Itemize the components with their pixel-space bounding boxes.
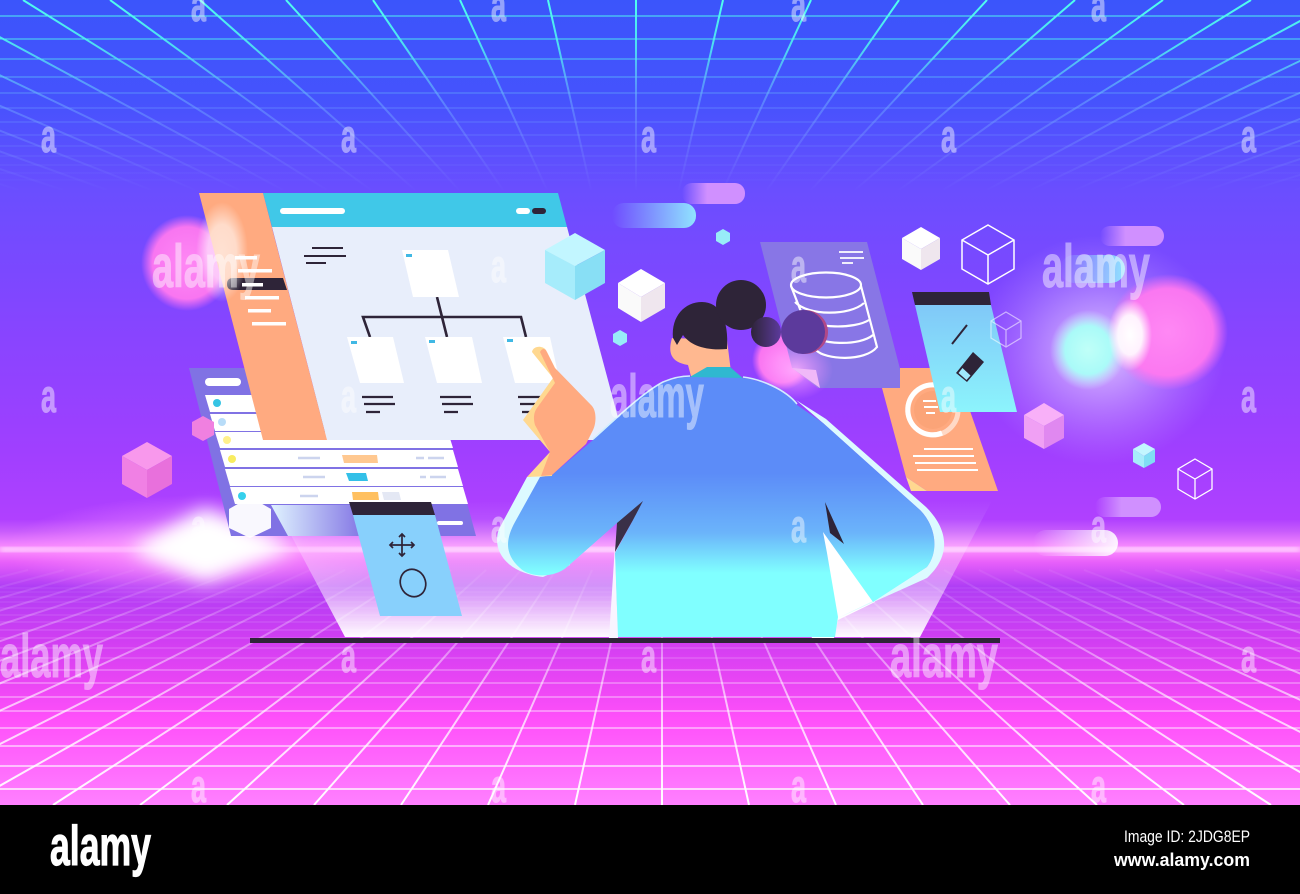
icon: pink cube left — [122, 442, 172, 498]
icon: white cube — [618, 269, 665, 322]
character: woman seen from behind — [497, 280, 944, 638]
collar — [688, 367, 745, 380]
jacket slit right — [825, 502, 844, 544]
shirt white gap — [812, 530, 875, 638]
icon: large blue cube — [545, 233, 605, 300]
icon: white blurred cube — [229, 497, 271, 538]
table footer pill — [437, 521, 463, 525]
face and neck — [670, 338, 732, 380]
floor perspective grid — [0, 570, 1300, 805]
canvas text lines — [304, 248, 346, 263]
icon: tiny cyan cube top — [716, 229, 730, 245]
horizon glow band — [0, 547, 1300, 552]
header buttons — [516, 208, 546, 214]
org chart connectors — [363, 297, 526, 337]
document glow — [757, 340, 833, 400]
panel: main diagram window — [196, 193, 624, 440]
hair bun small — [751, 317, 781, 347]
document lines — [913, 401, 978, 470]
document fold — [792, 368, 820, 388]
small watermark marks: a — [641, 630, 656, 682]
black stage bar — [250, 638, 1000, 643]
big watermark center: alamy — [610, 363, 704, 430]
small watermark marks: a — [1091, 760, 1106, 812]
small watermark marks: a — [791, 240, 806, 292]
footer url: www.alamy.com — [1113, 850, 1250, 870]
big watermark right: alamy — [1042, 233, 1150, 300]
panel: tool card with pencil and eraser — [912, 292, 1017, 412]
floating pill: blue — [612, 203, 696, 228]
document fold — [906, 477, 927, 491]
icon: faint outline cube — [991, 312, 1021, 347]
window canvas — [272, 227, 624, 440]
header title pill — [280, 208, 345, 214]
footer image id: Image ID: 2JDG8EP — [1124, 827, 1250, 846]
org chart captions — [362, 397, 550, 412]
small watermark marks: a — [491, 500, 506, 552]
light glow: soft halo right — [975, 235, 1225, 465]
icon: white cube right — [902, 227, 940, 270]
light glow: right pink orb — [1108, 274, 1228, 390]
hair bun purple — [781, 310, 828, 354]
icon: database cylinder — [791, 272, 877, 358]
small watermark marks: a — [641, 110, 656, 162]
floating pill: white lower right — [1033, 530, 1118, 556]
footer bar — [0, 805, 1300, 894]
big watermark left: alamy — [152, 233, 260, 300]
small watermark marks: a — [41, 370, 56, 422]
shirt strip left — [609, 545, 618, 638]
sidebar menu lines — [235, 256, 286, 326]
light glow: white core — [1108, 299, 1152, 371]
small watermark marks: a — [191, 760, 206, 812]
small watermark marks: a — [1241, 110, 1256, 162]
icon: eraser — [956, 352, 984, 382]
floating pill: cyan right — [1060, 255, 1125, 283]
shoulder highlight — [593, 376, 797, 439]
light glow: pink halo lower left — [5, 495, 405, 605]
panel: database document — [757, 242, 905, 400]
table title pill — [205, 378, 241, 386]
icon: outline cube — [962, 225, 1014, 284]
hair bun large — [716, 280, 766, 330]
hair — [673, 302, 727, 349]
floating pill: purple lower right — [1095, 497, 1161, 517]
small watermark marks: a — [491, 240, 506, 292]
small watermark marks: a — [191, 500, 206, 552]
icon: tiny cyan cube middle — [613, 330, 627, 346]
small watermark marks: a — [941, 370, 956, 422]
small watermark marks: a — [791, 760, 806, 812]
footer logo: alamy — [50, 814, 151, 877]
small watermark marks: a — [341, 630, 356, 682]
light glow: white flare lower left — [130, 508, 295, 582]
small watermark marks: a — [341, 370, 356, 422]
panel: orange chart document — [882, 368, 998, 491]
jacket left sleeve outline — [497, 475, 570, 577]
small watermark marks: a — [41, 110, 56, 162]
small watermark marks: a — [341, 110, 356, 162]
small watermark marks: a — [1241, 630, 1256, 682]
jacket right edge outline — [796, 400, 944, 618]
light glow: right cyan orb — [1050, 310, 1126, 390]
small watermark marks: a — [791, 500, 806, 552]
jacket body — [508, 377, 934, 637]
projection light beam — [275, 495, 995, 637]
small watermark marks: a — [491, 760, 506, 812]
small watermark marks: a — [941, 110, 956, 162]
floating pill: purple right — [1100, 226, 1164, 246]
window sidebar — [199, 193, 327, 440]
light glow: left pink orb — [141, 215, 233, 311]
big watermark lower left: alamy — [0, 623, 103, 690]
small watermark marks: a — [1241, 370, 1256, 422]
sidebar highlight — [196, 202, 248, 302]
jacket slit left — [615, 501, 643, 552]
hand yellow shade — [523, 347, 556, 477]
icon: small pink cube — [192, 416, 214, 441]
beam edge over table — [271, 505, 365, 536]
light glow: pink behind hair — [752, 330, 812, 390]
icon: move arrows — [390, 534, 414, 556]
icon: pink cube right — [1024, 403, 1064, 449]
table row dots and chips — [213, 399, 446, 500]
window header bar — [263, 193, 567, 227]
donut chart — [908, 385, 958, 435]
big watermark lower right: alamy — [890, 623, 998, 690]
small watermark marks: a — [1091, 500, 1106, 552]
panel: tool card with move and circle — [349, 502, 462, 616]
floating pill: purple top — [682, 183, 745, 204]
hand — [534, 349, 596, 476]
icon: outline cube lower right — [1178, 459, 1212, 499]
icon: pencil line — [952, 325, 967, 344]
table rows — [205, 395, 468, 504]
ceiling perspective grid — [0, 0, 1300, 190]
icon: circle tool — [396, 565, 430, 601]
icon: small cyan cube right — [1133, 443, 1155, 468]
org chart nodes — [347, 250, 560, 383]
org chart node tags — [351, 254, 513, 344]
sidebar active item — [227, 278, 287, 290]
panel: table window — [189, 368, 476, 536]
document text lines — [839, 252, 864, 263]
